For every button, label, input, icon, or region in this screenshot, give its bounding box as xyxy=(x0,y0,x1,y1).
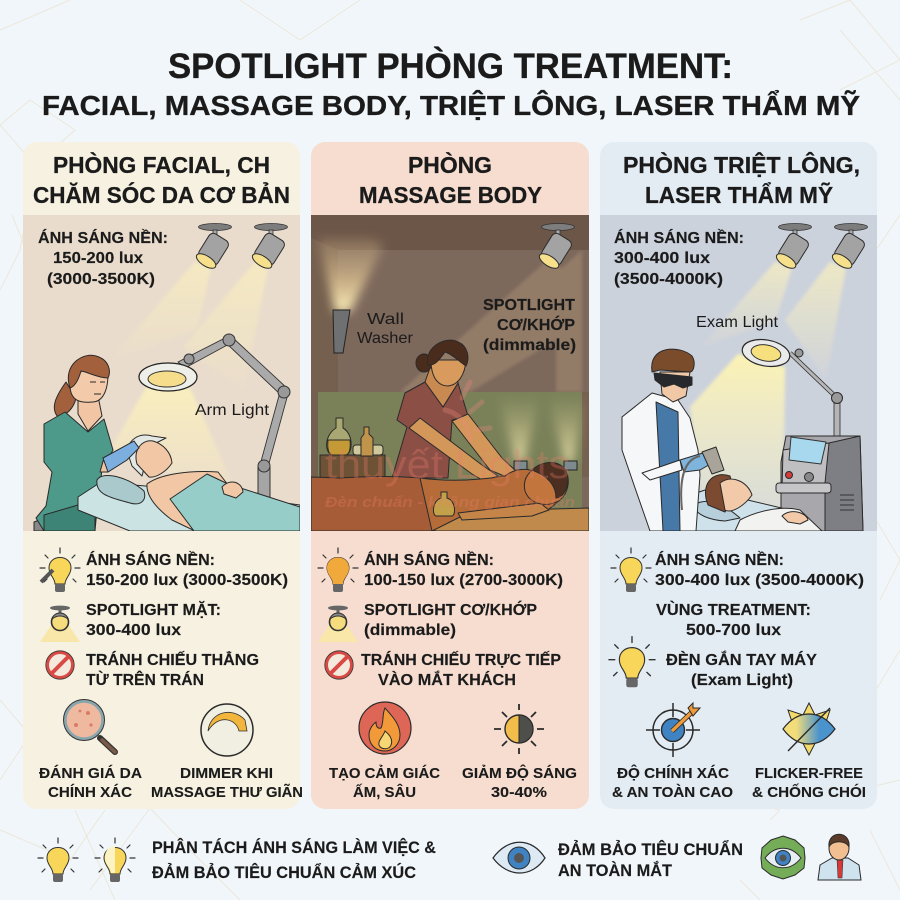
text: background light: ÁNH SÁNG NỀN: xyxy=(655,550,784,569)
panel: facial room xyxy=(23,142,303,809)
panel: massage room xyxy=(311,142,589,809)
background lux note: ÁNH SÁNG NỀN: xyxy=(38,228,168,247)
text: eye safety: ĐẢM BẢO TIÊU CHUẨN xyxy=(558,840,743,859)
watermark xyxy=(325,382,575,511)
side table and oils xyxy=(320,418,385,479)
text: exam light xyxy=(666,650,817,689)
client on bed xyxy=(78,435,300,531)
label: reduce brightness: 30-40% xyxy=(491,784,547,801)
icon: dimmer dial xyxy=(201,704,253,756)
text: background light: ÁNH SÁNG NỀN: xyxy=(86,550,215,569)
laser machine xyxy=(776,436,863,531)
background lux note: 150-200 lux xyxy=(53,250,143,267)
text: avoid eyes: TRÁNH CHIẾU TRỰC TIẾP xyxy=(361,650,561,669)
icon: skin magnifier xyxy=(64,700,115,752)
background lux note: 300-400 lux xyxy=(614,250,710,267)
label: reduce brightness xyxy=(462,764,577,801)
text: treatment zone: 500-700 lux xyxy=(686,622,781,639)
text: separate work light: PHÂN TÁCH ÁNH SÁNG LÀM VIỆC & xyxy=(152,838,436,857)
label: skin assessment xyxy=(39,765,142,801)
label: warm feeling xyxy=(329,765,440,801)
text: eye safety xyxy=(558,840,743,880)
text: treatment zone xyxy=(656,600,811,639)
title: FACIAL, MASSAGE BODY, TRIỆT LÔNG, LASER THẨM MỸ xyxy=(42,89,860,121)
text: exam light: ĐÈN GẮN TAY MÁY xyxy=(666,650,817,669)
text: background light: 150-200 lux (3000-3500K) xyxy=(86,572,288,589)
label: arm light: Arm Light xyxy=(195,402,270,419)
text: face spotlight xyxy=(86,600,221,639)
label: dimmer xyxy=(151,765,303,801)
footer: work lighting note xyxy=(38,838,436,882)
panel: laser room xyxy=(600,142,877,809)
icon: half sun xyxy=(494,704,544,754)
therapist xyxy=(34,354,114,531)
text: avoid forehead: TỪ TRÊN TRÁN xyxy=(86,670,204,689)
green lower wall xyxy=(318,392,582,510)
background lux note xyxy=(38,228,168,288)
illustration: massage room xyxy=(311,215,589,531)
icon: doctor xyxy=(818,834,861,880)
text: muscle spotlight xyxy=(364,600,537,639)
text: avoid forehead xyxy=(86,650,259,689)
label: exam light: Exam Light xyxy=(696,314,779,331)
text: eye safety: AN TOÀN MẮT xyxy=(558,861,673,880)
heading: laser room: LASER THẨM MỸ xyxy=(645,181,833,208)
icon: spotlight xyxy=(318,606,358,642)
text: avoid forehead: TRÁNH CHIẾU THẲNG xyxy=(86,650,259,669)
label: warm feeling: ẤM, SÂU xyxy=(353,783,416,801)
background lux note: ÁNH SÁNG NỀN: xyxy=(614,228,744,247)
text: background light: 300-400 lux (3500-4000K) xyxy=(655,572,864,589)
client xyxy=(458,462,568,520)
watermark: Đèn chuẩn - không gian chuẩn xyxy=(325,494,575,511)
icon: large bulb xyxy=(609,637,655,687)
text: background light xyxy=(655,550,864,589)
background lux note xyxy=(614,228,744,288)
icon: warm bulb xyxy=(318,548,358,592)
label: flicker-free: & CHỐNG CHÓI xyxy=(752,783,866,801)
heading: laser room: PHÒNG TRIỆT LÔNG, xyxy=(623,151,860,178)
label: skin assessment: CHÍNH XÁC xyxy=(48,784,132,801)
text: muscle spotlight: (dimmable) xyxy=(364,622,456,639)
icon: spotlight xyxy=(40,606,80,642)
icon: target xyxy=(646,703,700,757)
label: warm feeling: TẠO CẢM GIÁC xyxy=(329,765,440,782)
candle glow xyxy=(502,402,584,470)
title: SPOTLIGHT PHÒNG TREATMENT: xyxy=(168,46,733,86)
heading: massage room xyxy=(359,151,542,208)
small oil bottle xyxy=(433,492,455,516)
wall washer light xyxy=(318,238,384,312)
label: wall washer xyxy=(357,312,413,343)
icon: prohibition xyxy=(46,651,74,679)
text: separate work light: ĐẢM BẢO TIÊU CHUẨN CẢM XÚC xyxy=(152,863,416,882)
label: precision xyxy=(612,764,733,801)
icon: two bulbs xyxy=(38,838,135,882)
illustration: laser room xyxy=(600,215,877,531)
label: skin assessment: ĐÁNH GIÁ DA xyxy=(39,765,142,782)
text: exam light: (Exam Light) xyxy=(691,672,793,689)
patient on bed xyxy=(696,474,822,531)
text: background light xyxy=(364,550,563,589)
background lux note: (3000-3500K) xyxy=(47,271,155,288)
text: background light: 100-150 lux (2700-3000K) xyxy=(364,572,563,589)
list: laser specs xyxy=(609,548,864,689)
therapist xyxy=(392,340,518,481)
lamp xyxy=(537,224,574,271)
watermark: thuyết Lights xyxy=(325,443,570,487)
heading: facial room: PHÒNG FACIAL, CH xyxy=(53,151,270,178)
label: spotlight: CƠ/KHỚP xyxy=(497,315,575,334)
text: muscle spotlight: SPOTLIGHT CƠ/KHỚP xyxy=(364,600,537,619)
label: precision: & AN TOÀN CAO xyxy=(612,784,733,801)
icon: bulb xyxy=(611,548,651,592)
heading: facial room: CHĂM SÓC DA CƠ BẢN xyxy=(33,180,290,208)
text: background light: ÁNH SÁNG NỀN: xyxy=(364,550,494,569)
label: dimmer: DIMMER KHI xyxy=(180,765,273,782)
heading: massage room: MASSAGE BODY xyxy=(359,182,542,208)
track lights xyxy=(194,224,288,271)
text: face spotlight: 300-400 lux xyxy=(86,622,181,639)
label: dimmer: MASSAGE THƯ GIÃN xyxy=(151,783,303,801)
icon: prohibition xyxy=(325,651,353,679)
label: flicker-free: FLICKER-FREE xyxy=(755,765,863,782)
label: spotlight xyxy=(483,297,576,354)
illustration: facial room xyxy=(23,215,300,531)
text: treatment zone: VÙNG TREATMENT: xyxy=(656,600,811,619)
label: reduce brightness: GIẢM ĐỘ SÁNG xyxy=(462,764,577,782)
icon: eye xyxy=(493,842,545,873)
arm lamp xyxy=(139,334,290,497)
text: face spotlight: SPOTLIGHT MẶT: xyxy=(86,600,221,619)
text: separate work light xyxy=(152,838,436,882)
label: spotlight: (dimmable) xyxy=(483,337,576,354)
list: facial specs xyxy=(40,548,288,689)
wall washer xyxy=(333,310,350,353)
massage bed xyxy=(311,469,589,531)
list: massage specs xyxy=(318,548,563,689)
text: background light xyxy=(86,550,288,589)
label: wall washer: Washer xyxy=(357,330,414,347)
heading: laser room xyxy=(623,151,860,208)
label: wall washer: Wall xyxy=(367,311,404,328)
spotlight beam xyxy=(400,250,582,392)
icon: certified eye badge xyxy=(761,836,805,879)
track lights xyxy=(774,224,868,271)
exam lamp xyxy=(740,336,842,438)
label: precision: ĐỘ CHÍNH XÁC xyxy=(617,764,729,782)
icon: flicker-free eye xyxy=(783,703,835,755)
text: avoid eyes xyxy=(361,650,561,689)
label: spotlight: SPOTLIGHT xyxy=(483,297,575,314)
heading: facial room xyxy=(33,151,290,208)
icon: flame xyxy=(359,702,411,754)
therapist glove xyxy=(103,441,139,472)
heading: massage room: PHÒNG xyxy=(408,151,492,178)
doctor xyxy=(622,349,724,531)
text: avoid eyes: VÀO MẮT KHÁCH xyxy=(378,670,516,689)
title xyxy=(42,46,860,121)
label: flicker-free xyxy=(752,765,866,801)
footer: eye safety note xyxy=(493,834,861,880)
background lux note: (3500-4000K) xyxy=(614,271,723,288)
icon: bulb with tool xyxy=(40,548,80,592)
